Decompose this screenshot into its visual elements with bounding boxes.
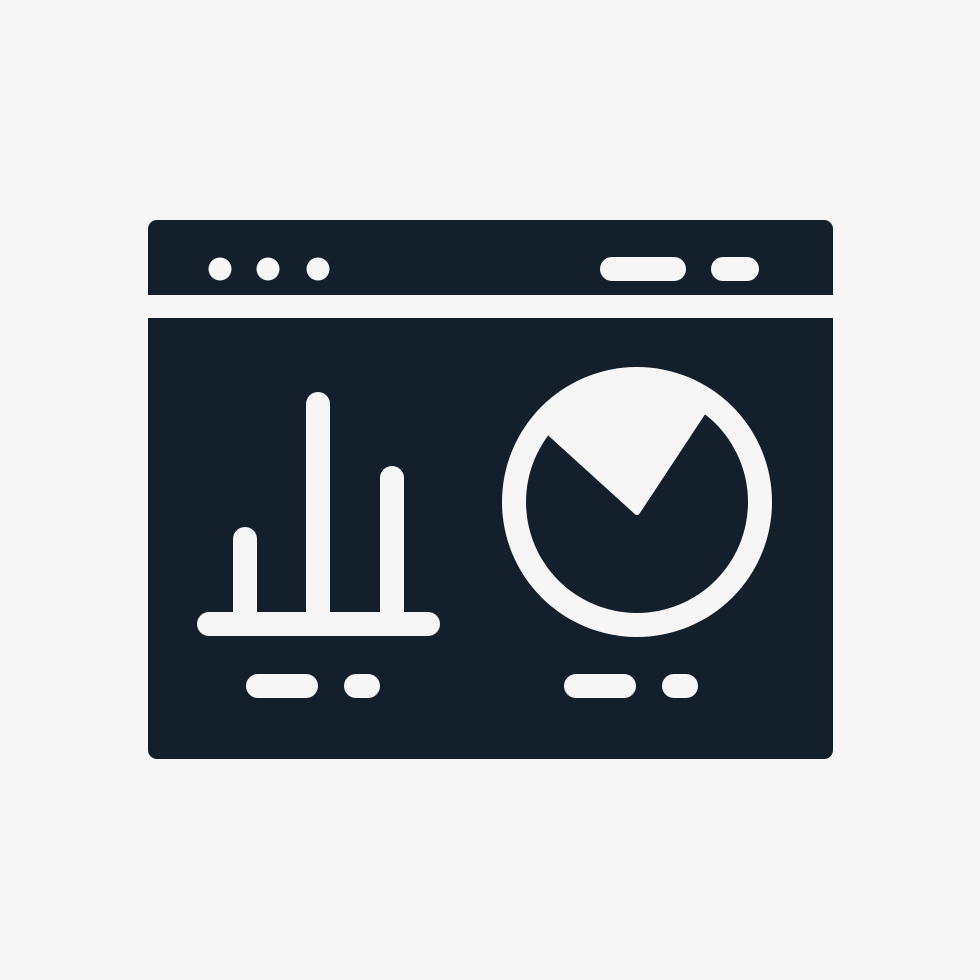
- panel: browser window: [148, 220, 833, 759]
- bar chart: [197, 392, 440, 636]
- pie chart caption pills: [564, 674, 698, 698]
- icon: header pills: [600, 257, 759, 281]
- bar chart caption pills: [246, 674, 380, 698]
- pie chart: [502, 367, 772, 637]
- icon: window dots: [208, 258, 330, 280]
